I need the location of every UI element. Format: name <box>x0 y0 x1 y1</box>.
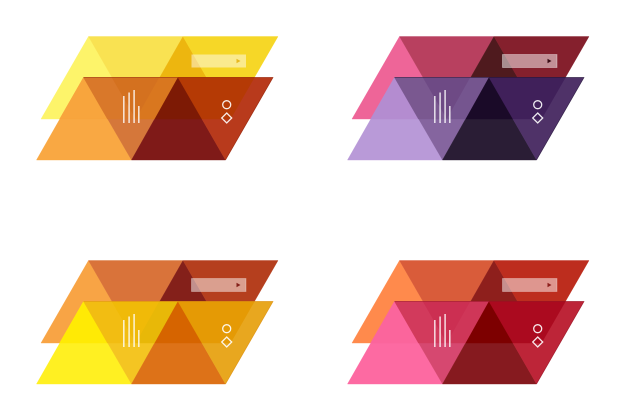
icon: circle <box>534 101 542 109</box>
overlap band <box>371 302 584 384</box>
panel: yellow and rust banner (top left) <box>36 36 278 160</box>
icon: bar chart <box>123 90 140 123</box>
icon: diamond <box>533 113 543 123</box>
panel: orange and yellow banner (bottom left) <box>36 260 278 384</box>
front layer: purple triangles <box>348 78 584 160</box>
back layer: crimson triangles <box>352 36 589 119</box>
icon: bar chart <box>434 90 451 123</box>
front layer: yellow triangles <box>36 302 273 384</box>
button: arrow label <box>502 54 557 68</box>
button: arrow label <box>502 278 557 292</box>
button: arrow label <box>192 54 246 68</box>
icon: diamond <box>222 113 232 123</box>
icon: circle <box>534 325 542 333</box>
overlap band <box>60 78 273 160</box>
panel: red and pink banner (bottom right) <box>348 260 589 384</box>
overlap band <box>371 78 584 160</box>
overlap band <box>60 302 273 384</box>
back layer: orange-red triangles <box>352 260 589 343</box>
front layer: pink and crimson triangles <box>348 302 584 384</box>
back layer: rust triangles <box>41 260 278 343</box>
back layer: yellow triangles <box>41 36 278 119</box>
icon: circle <box>223 101 231 109</box>
panel: pink and purple banner (top right) <box>348 36 589 160</box>
icon: bar chart <box>434 314 451 347</box>
front layer: orange triangles <box>36 78 273 160</box>
icon: diamond <box>222 337 232 347</box>
icon: circle <box>223 325 231 333</box>
icon: diamond <box>533 337 543 347</box>
icon: bar chart <box>123 314 140 347</box>
button: arrow label <box>192 278 246 292</box>
